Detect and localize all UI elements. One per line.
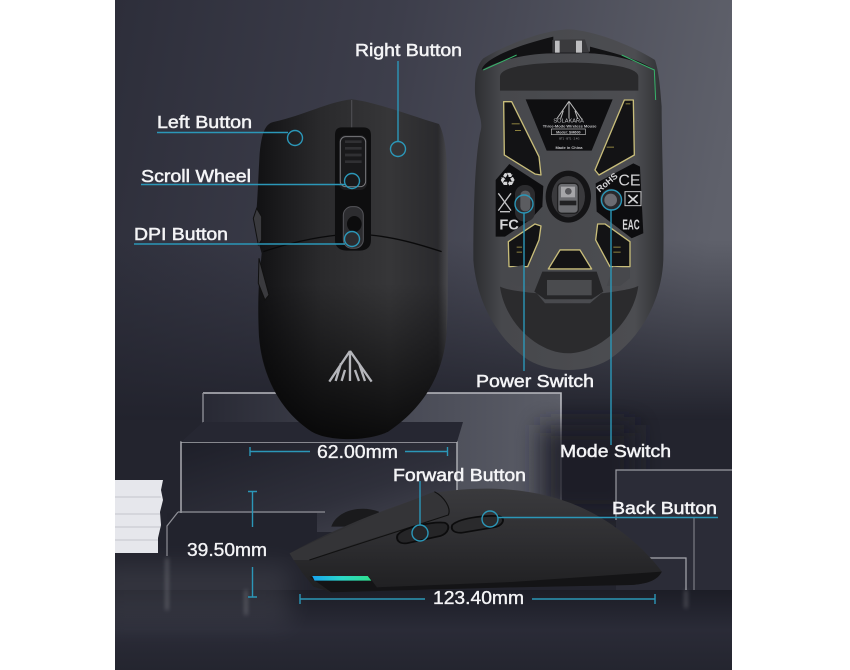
- label: Right Button: Right Button: [355, 40, 462, 60]
- dimension: height: [248, 492, 257, 597]
- label: Back Button: Back Button: [612, 498, 717, 518]
- power switch slot: [515, 185, 535, 222]
- background panel: [100, 0, 732, 670]
- right certification panel: [595, 163, 643, 238]
- side view mouse: [290, 489, 662, 592]
- dimension value: 123.40mm: 123.40mm: [433, 588, 524, 608]
- callout: power switch: [515, 195, 533, 371]
- callout: back button: [482, 511, 718, 527]
- label: Left Button: Left Button: [157, 112, 252, 132]
- callout: scroll wheel: [141, 174, 360, 188]
- white stacked blocks: [115, 480, 163, 553]
- callout: left button: [157, 130, 302, 146]
- label: Scroll Wheel: Scroll Wheel: [141, 166, 251, 186]
- left certification panel: FC: [499, 217, 519, 233]
- top glide pad: [500, 63, 638, 91]
- left certification panel: ♻: [499, 170, 516, 191]
- callout: DPI button: [134, 232, 360, 246]
- dimension value: 62.00mm: 62.00mm: [317, 442, 398, 462]
- bottom glide and dongle: [500, 265, 638, 353]
- callout: right button: [390, 61, 406, 156]
- label plate: [526, 99, 613, 151]
- gold skate pads: [504, 100, 634, 269]
- dimension: width: [250, 447, 448, 456]
- label plate: Model: SM600: [556, 130, 581, 134]
- callout: forward button: [412, 481, 428, 541]
- label: Mode Switch: Mode Switch: [560, 441, 671, 461]
- label: Forward Button: Forward Button: [393, 465, 526, 485]
- label plate: BT1 · BT1 · 2.4G: [559, 136, 579, 140]
- right certification panel: RoHS: [595, 171, 620, 194]
- left certification panel: [496, 164, 543, 237]
- forward side button: [397, 523, 448, 543]
- right certification panel: CE: [618, 172, 641, 189]
- callout: mode switch: [602, 190, 622, 445]
- right certification panel: EAC: [622, 217, 640, 233]
- DPI button: [343, 207, 363, 248]
- label plate: SOLAKARA: [553, 118, 584, 124]
- label: Power Switch: Power Switch: [476, 371, 594, 391]
- mouse body underside: [473, 29, 664, 370]
- scroll wheel underside: [552, 39, 589, 53]
- back side button: [452, 516, 503, 533]
- underside mouse: [473, 29, 664, 370]
- label plate: Three-Mode Wireless Mouse: [543, 123, 597, 128]
- label plate: Made in China: [555, 145, 583, 150]
- display pedestals: [115, 392, 732, 640]
- scroll wheel bump: [331, 509, 379, 527]
- dimension value: 39.50mm: 39.50mm: [187, 540, 267, 560]
- mouse body side: [290, 489, 662, 592]
- infographic canvas: [115, 0, 732, 670]
- top view mouse: [253, 99, 448, 439]
- mode switch slot: [600, 189, 621, 210]
- scroll wheel: [335, 127, 371, 251]
- side buttons: [253, 208, 269, 300]
- dimension: length: [300, 594, 655, 604]
- dotted gold circuits: [512, 103, 630, 253]
- mouse body top view: [253, 99, 448, 439]
- LED strip: [312, 576, 371, 581]
- label: DPI Button: DPI Button: [134, 224, 228, 244]
- callout lines: [134, 61, 718, 604]
- optical sensor: [546, 171, 591, 223]
- logo: [329, 351, 372, 382]
